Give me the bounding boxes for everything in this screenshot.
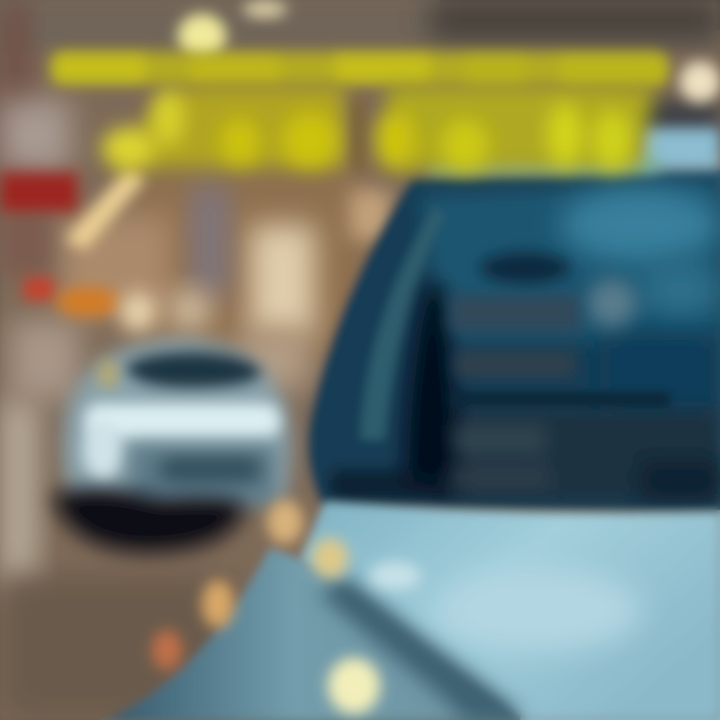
ceiling lights [178,0,720,102]
red and orange signs on the left [0,165,210,332]
orange and cream marker lights [152,500,421,670]
foreground car front fender [105,548,525,720]
title: blurred yellow headline [52,52,667,171]
foreground car windshield frame [308,128,720,512]
windshield glass [330,180,720,500]
foreground car hood [300,502,720,720]
distant white car [52,338,291,552]
